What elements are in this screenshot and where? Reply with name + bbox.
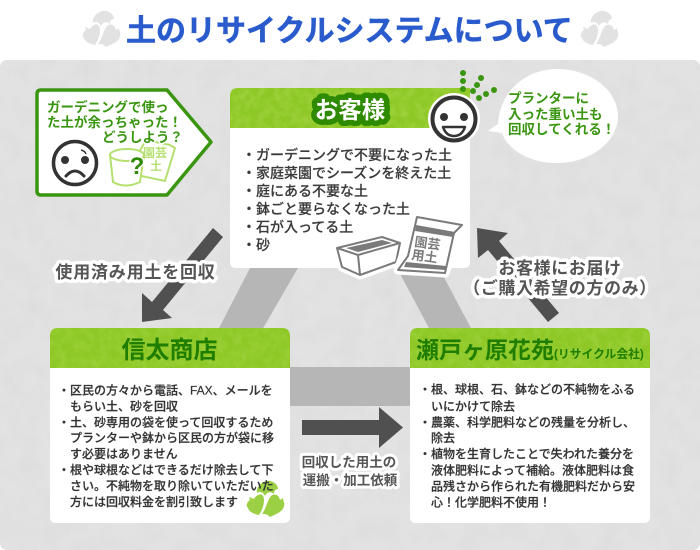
customer list: ・家庭菜園でシーズンを終えた土 [242,165,451,181]
recycler list: 液体肥料によって補給。液体肥料は食 [431,462,634,478]
callout text: どうしよう？ [102,130,183,145]
title text: 土のリサイクルシステムについて [126,15,573,48]
recycler list: ・根、球根、石、鉢などの不純物をふる [419,382,635,396]
panel: Shinta shop [50,328,290,523]
icon: soil bag: 園芸 [414,234,441,253]
recycler list [419,382,635,510]
customer list: ・砂 [242,237,270,253]
icon: soil bag [398,217,462,273]
customer list: ・石が入ってる土 [242,219,353,235]
speech text: プランターに [508,91,589,106]
recycler list: ・農薬、科学肥料などの残量を分析し、 [419,414,635,430]
cycle band triangle [218,268,472,406]
speech text [508,91,615,137]
shop list: ・区民の方々から電話、FAX、メールを [58,382,273,398]
icon: recycle mark right [581,11,618,47]
recycler list: 除去 [431,430,455,445]
icon: pot and soil bag: 土 [150,158,162,173]
icon: soil bag: 用土 [411,247,438,266]
title [83,11,618,48]
arrow label: transport: 運搬・加工依頼 [303,472,398,488]
icon: pot and soil bag [110,140,175,186]
shop heading: 信太商店 [122,337,218,364]
customer list [242,147,452,253]
icon: pot and soil bag: ? [130,153,144,180]
speech text: 入った重い土も [508,107,602,122]
arrow label: delivery: お客様にお届け [498,258,622,278]
shop list [58,382,274,509]
arrow label: transport [302,455,398,488]
callout text [47,99,183,145]
arrow label: delivery [463,258,657,298]
callout text: ガーデニングで使っ [47,99,168,115]
shop list: さい。不純物を取り除いていただいた [70,478,274,493]
arrow label: delivery: （ご購入希望の方のみ） [463,278,657,298]
customer list: ・鉢ごと要らなくなった土 [242,201,410,217]
customer list: ・ガーデニングで不要になった土 [242,147,452,163]
arrow label: collect used soil: 使用済み用土を回収 [55,263,216,282]
icon: recycle mark [247,481,284,517]
speech text: 回収してくれる！ [508,122,615,137]
arrow: shop to recycler [302,407,403,448]
icon: sparkle dots [460,70,497,101]
speech bubble: customer [488,69,618,163]
shop list: もらい土、砂を回収 [70,400,178,414]
callout: leftover soil [37,90,211,195]
shop list: す必要はありません [70,447,178,461]
customer heading: お客様 [315,97,386,123]
icon: recycle mark left [83,11,120,47]
panel: customer [230,88,470,275]
shop list: プランターや鉢から区民の方が袋に移 [70,430,274,445]
icon: sad face [54,142,96,184]
recycler list: 品残さから作られた有機肥料だから安 [431,478,635,494]
shop list: 方には回収料金を割引致します [70,494,238,509]
shop list: ・根や球根などはできるだけ除去して下 [58,462,273,477]
panel: Setogahara Kaen [410,328,650,523]
icon: tray [337,237,400,275]
customer list: ・庭にある不要な土 [242,183,368,199]
recycler list: いにかけて除去 [431,398,515,414]
recycler list: ・植物を生育したことで失われた養分を [419,446,634,461]
icon: happy face [428,93,480,145]
shop list: ・土、砂専用の袋を使って回収するため [58,414,273,430]
arrow: customer to shop [142,228,223,322]
callout text: た土が余っちゃった！ [47,114,182,130]
recycler list: 心！化学肥料不使用！ [431,494,551,510]
recycler heading: 瀬戸ヶ原花苑(リサイクル会社) [416,337,644,363]
arrow: recycler to customer [477,228,559,322]
arrow label: transport: 回収した用土の [302,455,396,470]
icon: pot and soil bag: 園芸 [143,145,167,160]
